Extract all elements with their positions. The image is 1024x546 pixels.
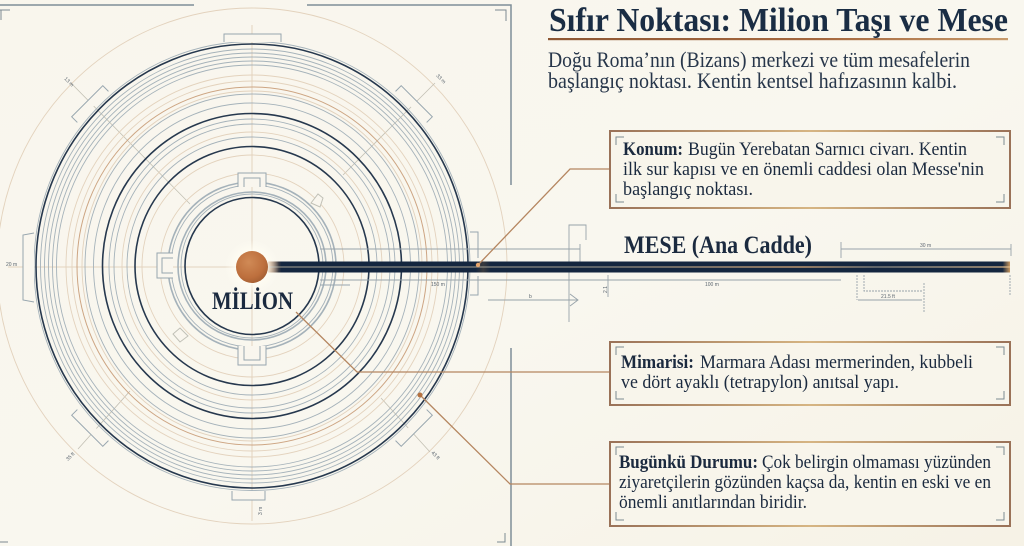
- subtitle: [548, 47, 970, 93]
- scale labels: 35 ft: [65, 451, 77, 462]
- panel: Mimarisi: Mimarisi:: [621, 352, 694, 373]
- scale labels: 3 m: [258, 507, 264, 515]
- scale labels: 43 ft: [430, 450, 441, 462]
- Mese label: MESE (Ana Cadde): [624, 232, 812, 259]
- dimension lines along Mese: 21.5 ft: [881, 294, 896, 300]
- panel: Bugünkü Durumu: önemli anıtlarından biridir.: [619, 492, 807, 513]
- panel: Konum: [610, 131, 1010, 208]
- dimension lines along Mese: 30 m: [920, 243, 931, 249]
- scale labels: 150 m: [431, 282, 445, 288]
- blueprint frame: [0, 5, 511, 546]
- panel: Konum: Konum:: [623, 139, 683, 160]
- Mese road bar: [268, 262, 1010, 272]
- dimension lines along Mese: b: [529, 294, 532, 300]
- scale labels: 20 m: [6, 262, 17, 268]
- inner gate ring: [157, 173, 350, 365]
- panel: Konum: ilk sur kapısı ve en önemli caddesi olan Messe'nin: [623, 159, 984, 180]
- outer survey ring: [0, 8, 507, 524]
- panel: Konum: Bugün Yerebatan Sarnıcı civarı. Kentin: [688, 139, 967, 160]
- panel: Konum: başlangıç noktası.: [623, 179, 753, 200]
- title rule: [548, 38, 1008, 40]
- leader line: Konum: [476, 169, 610, 267]
- subtitle: başlangıç noktası. Kentin kentsel hafızasının kalbi.: [548, 68, 957, 93]
- panel: Mimarisi: Marmara Adası mermerinden, kubbeli: [700, 352, 973, 373]
- diagonal dimension lines: [71, 83, 435, 452]
- panel: Mimarisi: [610, 342, 1010, 405]
- leader line: Mimarisi: [296, 312, 610, 372]
- Milion stone marker: [225, 240, 279, 294]
- dimension lines along Mese: 100 m: [705, 282, 719, 288]
- Milion label: MİLİON: [212, 287, 293, 315]
- subtitle: Doğu Roma’nın (Bizans) merkezi ve tüm mesafelerin: [548, 47, 970, 72]
- crosshair axes: [8, 25, 252, 521]
- panel: Bugünkü Durumu: Bugünkü Durumu:: [619, 452, 758, 473]
- panel: Bugünkü Durumu: ziyaretçilerin gözünden kaçsa da, kentin en eski ve en: [619, 472, 991, 493]
- dimension lines along Mese: 2.1: [603, 286, 609, 293]
- scale labels: 33 m: [435, 73, 447, 85]
- concentric plan of the Milion: [0, 8, 507, 524]
- leader line: Bugünkü Durumu: [418, 392, 610, 484]
- panel: Mimarisi: ve dört ayaklı (tetrapylon) anıtsal yapı.: [621, 372, 899, 393]
- panel: Bugünkü Durumu: Çok belirgin olmaması yüzünden: [762, 452, 991, 473]
- panel: Bugünkü Durumu: [610, 442, 1010, 526]
- outer rings: [34, 42, 470, 490]
- dimension lines along Mese: [320, 225, 1011, 322]
- outer buttresses: [23, 34, 478, 500]
- scale labels: [6, 73, 447, 515]
- scale labels: 13 m: [63, 76, 75, 88]
